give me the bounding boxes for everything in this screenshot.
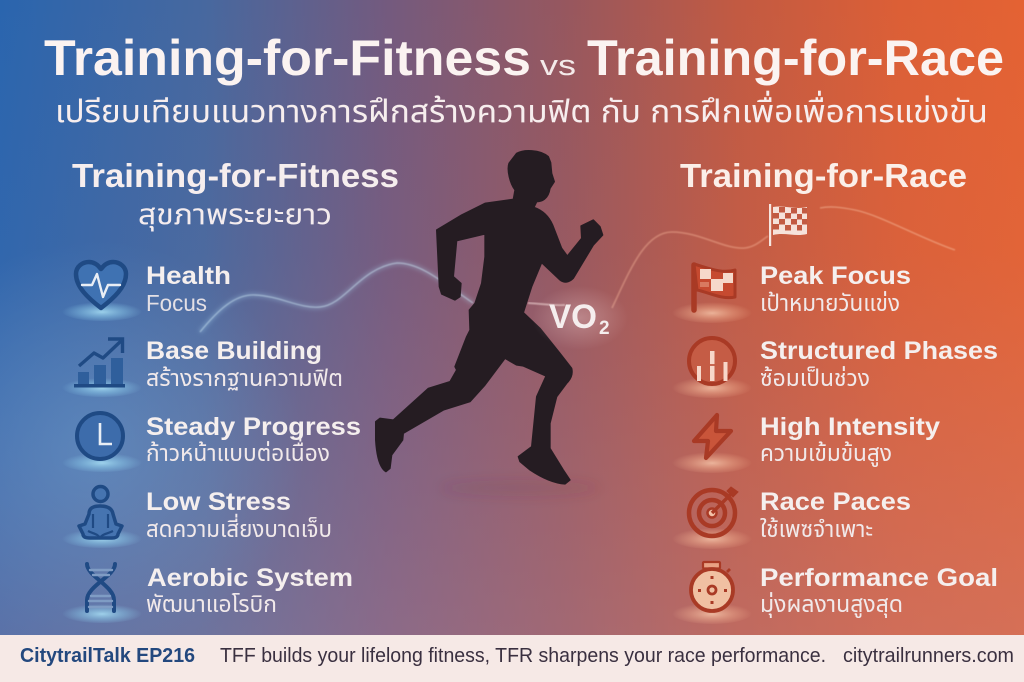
item: performance goal: Performance Goal bbox=[760, 564, 998, 592]
item: steady progress: Steady Progress bbox=[146, 413, 361, 441]
panel: training for fitness bbox=[62, 157, 399, 623]
item: high intensity: ความเข้มข้นสูง bbox=[760, 440, 892, 468]
item: structured phases: ซ้อมเป็นช่วง bbox=[760, 365, 870, 391]
item: race paces: Race Paces bbox=[760, 488, 911, 516]
icon: phases gauge bbox=[689, 338, 735, 384]
item: health bbox=[62, 262, 231, 321]
footer website: citytrailrunners.com bbox=[843, 645, 1014, 667]
item: health: Health bbox=[146, 262, 231, 290]
icon: stopwatch bbox=[691, 562, 733, 611]
left column Thai subheading: สุขภาพระยะยาว bbox=[138, 199, 332, 231]
item: performance goal bbox=[672, 562, 998, 624]
item: peak focus: เป้าหมายวันแข่ง bbox=[760, 290, 900, 316]
item: base building: สร้างรากฐานความฟิต bbox=[146, 365, 343, 391]
item: low stress: สดความเสี่ยงบาดเจ็บ bbox=[146, 513, 332, 542]
icon: checkered flag bbox=[769, 204, 807, 246]
footer brand: CitytrailTalk EP216 bbox=[20, 645, 195, 667]
item: low stress: Low Stress bbox=[146, 488, 291, 516]
footer bar bbox=[0, 635, 1024, 682]
VO2 label: 2 bbox=[599, 318, 610, 339]
icon: target bbox=[689, 487, 738, 536]
item: aerobic system: พัฒนาแอโรบิก bbox=[146, 591, 277, 617]
icon: rising bar chart bbox=[74, 339, 125, 388]
item: peak focus: Peak Focus bbox=[760, 262, 911, 290]
footer tagline: TFF builds your lifelong fitness, TFR sharpens your race performance. bbox=[220, 645, 826, 667]
item: performance goal: มุ่งผลงานสูงสุด bbox=[760, 591, 903, 619]
item: high intensity bbox=[672, 413, 940, 473]
Thai subtitle: เปรียบเทียบแนวทางการฝึกสร้างความฟิต กับ การฝึกเพื่อเพื่อการแข่งขัน bbox=[55, 90, 988, 129]
left column heading: Training-for-Fitness bbox=[72, 157, 399, 194]
main title bbox=[44, 30, 1004, 86]
item: base building bbox=[62, 337, 343, 397]
item: race paces bbox=[672, 487, 911, 549]
main title: vs bbox=[540, 50, 576, 82]
item: steady progress: ก้าวหน้าแบบต่อเนื่อง bbox=[146, 437, 330, 466]
ground shadow bbox=[440, 480, 600, 496]
icon: race flag bbox=[694, 264, 735, 310]
item: peak focus bbox=[672, 262, 911, 323]
icon: clock bbox=[77, 413, 123, 459]
item: base building: Base Building bbox=[146, 337, 322, 365]
panel: training for race bbox=[672, 157, 998, 624]
item: structured phases bbox=[672, 337, 998, 398]
VO2 label: VO bbox=[549, 298, 597, 336]
item: race paces: ใช้เพซจำเพาะ bbox=[760, 516, 873, 542]
item: structured phases: Structured Phases bbox=[760, 337, 998, 365]
item: high intensity: High Intensity bbox=[760, 413, 940, 441]
right column heading: Training-for-Race bbox=[680, 157, 967, 194]
item: health: Focus bbox=[146, 290, 207, 316]
VO2 label bbox=[532, 286, 628, 350]
item: steady progress bbox=[62, 413, 361, 472]
main title: Training-for-Race bbox=[587, 30, 1004, 86]
runner silhouette bbox=[376, 151, 603, 484]
icon: heart bbox=[76, 262, 126, 308]
icon: lightning bolt bbox=[694, 415, 731, 458]
heartbeat wave line bbox=[200, 207, 955, 332]
main title: Training-for-Fitness bbox=[44, 30, 531, 86]
item: aerobic system: Aerobic System bbox=[147, 564, 353, 592]
icon: meditation figure bbox=[79, 486, 122, 538]
icon: DNA helix bbox=[87, 564, 115, 611]
item: low stress bbox=[62, 486, 332, 548]
item: aerobic system bbox=[62, 564, 353, 623]
